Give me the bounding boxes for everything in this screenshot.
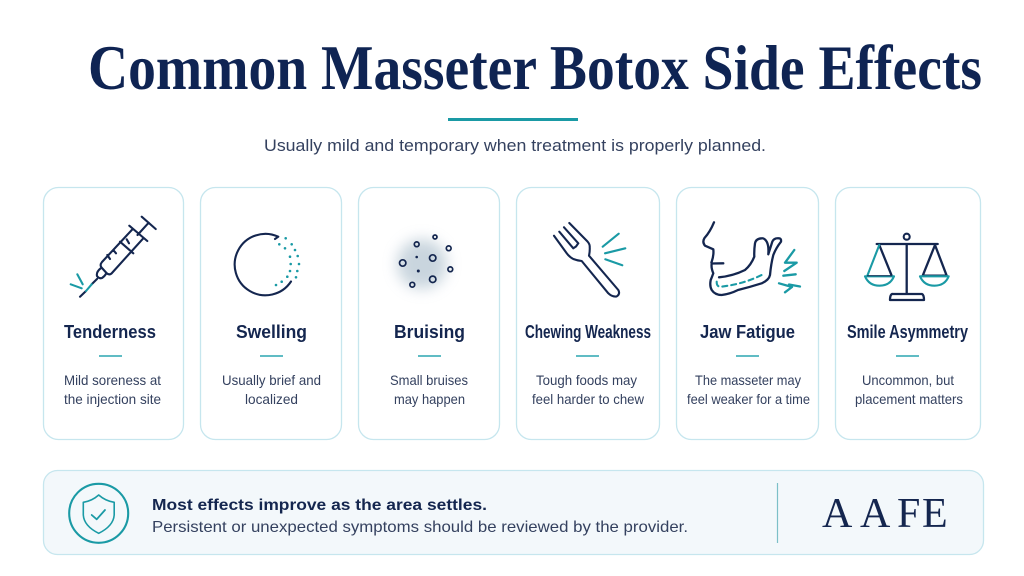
heading: jaw fatigue: Jaw Fatigue [700, 321, 795, 342]
text: chewing description [532, 372, 645, 407]
panel: chewing weakness [516, 188, 660, 440]
heading: bruising: Bruising [394, 321, 465, 342]
panel: swelling [200, 188, 342, 440]
icon: shield check [69, 484, 128, 543]
text: jaw description: feel weaker for a time [687, 391, 810, 407]
heading: tenderness: Tenderness [64, 321, 156, 342]
icon: swelling circle [235, 234, 300, 295]
text: note regular line: Persistent or unexpected symptoms should be reviewed by the provider. [152, 519, 688, 536]
text: jaw description [687, 372, 810, 407]
text: swelling description [222, 372, 321, 407]
icon: balance scale [865, 234, 949, 300]
heading: swelling: Swelling [236, 321, 307, 342]
icon: syringe [71, 217, 156, 297]
panel: bottom note [44, 470, 984, 554]
icon: jaw [703, 222, 800, 295]
icon: bruise spots [397, 235, 453, 289]
logo: AAFE: AAFE [822, 491, 948, 537]
text: tenderness description: the injection site [64, 391, 161, 407]
text: tenderness description: Mild soreness at [64, 372, 161, 388]
text: tenderness description [64, 372, 161, 407]
panel: tenderness [44, 188, 184, 440]
icon: fork [554, 223, 625, 297]
text: chewing description: Tough foods may [536, 372, 637, 388]
panel: bruising [358, 188, 500, 440]
text: chewing description: feel harder to chew [532, 391, 645, 407]
title underline [448, 118, 578, 121]
subtitle: Usually mild and temporary when treatment is properly planned. [264, 136, 766, 155]
panel: jaw fatigue [676, 188, 818, 440]
text: bruising description: may happen [394, 391, 465, 407]
text: swelling description: localized [245, 391, 298, 407]
text: bruising description: Small bruises [390, 372, 468, 388]
panel: smile asymmetry [836, 188, 980, 440]
text: jaw description: The masseter may [695, 372, 801, 388]
text: bruising description [390, 372, 468, 407]
text: smile description: placement matters [855, 391, 963, 407]
heading: chewing weakness: Chewing Weakness [525, 321, 651, 342]
text: note bold line: Most effects improve as the area settles. [152, 497, 487, 514]
text: swelling description: Usually brief and [222, 372, 321, 388]
heading: smile asymmetry: Smile Asymmetry [847, 321, 969, 342]
text: smile description: Uncommon, but [862, 372, 954, 388]
text: smile description [855, 372, 963, 407]
